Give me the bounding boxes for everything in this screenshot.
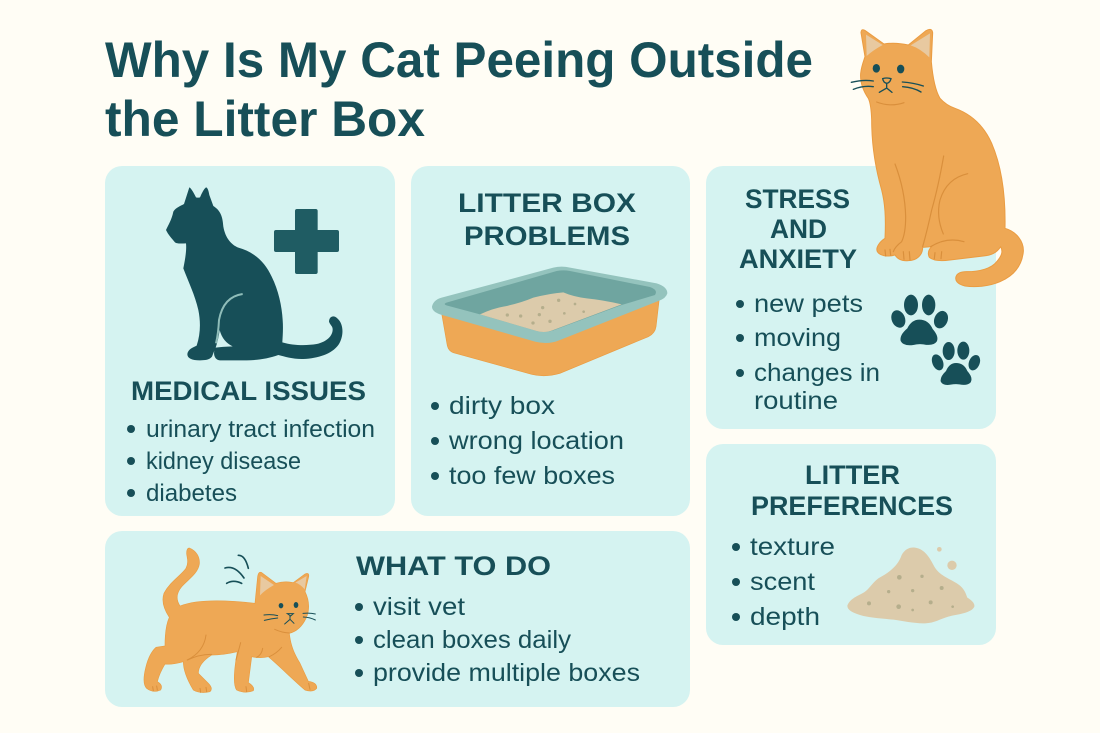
panel: medical issues [105,166,395,516]
list: actions: clean boxes daily [373,626,572,654]
heading: stress and anxiety [739,184,857,274]
list: litter preferences [732,533,835,631]
icon: startled walking cat [144,548,317,693]
heading: litter preferences: LITTER [805,460,900,490]
heading: medical issues: MEDICAL ISSUES [131,376,366,406]
heading: what to do: WHAT TO DO [356,551,551,581]
title [105,32,813,147]
title: Why Is My Cat Peeing Outside [105,32,813,88]
list: litter preferences: depth [750,603,820,631]
icon: sitting orange cat [851,29,1023,287]
list: medical causes: urinary tract infection [146,416,375,443]
list: litter box problems: dirty box [449,392,556,420]
heading: litter box problems: PROBLEMS [464,221,630,251]
list: medical causes: diabetes [146,480,237,507]
heading: litter box problems [458,188,636,251]
list: litter box problems: too few boxes [449,462,615,490]
list: stressors: new pets [754,290,863,318]
list: stressors: moving [754,324,841,352]
panel: litter box problems [411,166,690,516]
list: litter box problems [431,392,624,490]
list: stressors: routine [754,387,838,415]
heading: stress and anxiety: ANXIETY [739,244,857,274]
list: stressors [736,290,880,415]
heading: litter preferences [751,460,953,521]
icon: cat silhouette with medical cross [166,187,342,360]
list: medical causes: kidney disease [146,448,301,475]
list: litter preferences: texture [750,533,835,561]
panel: stress and anxiety [706,166,996,429]
title: the Litter Box [105,91,425,147]
heading: litter box problems: LITTER BOX [458,188,636,218]
list: actions: visit vet [373,593,465,621]
heading: litter preferences: PREFERENCES [751,491,953,521]
heading: stress and anxiety: STRESS [745,184,850,214]
panel: what to do [105,531,690,707]
list: actions: provide multiple boxes [373,659,640,687]
icon: paw prints [889,295,982,385]
list: actions [355,593,640,687]
list: litter box problems: wrong location [448,427,624,455]
heading: stress and anxiety: AND [770,214,827,244]
icon: litter pile [847,547,974,623]
list: stressors: changes in [754,359,880,387]
icon: litter box [432,267,667,376]
panel: litter preferences [706,444,996,645]
list: litter preferences: scent [750,568,815,596]
list: medical causes [127,416,375,507]
